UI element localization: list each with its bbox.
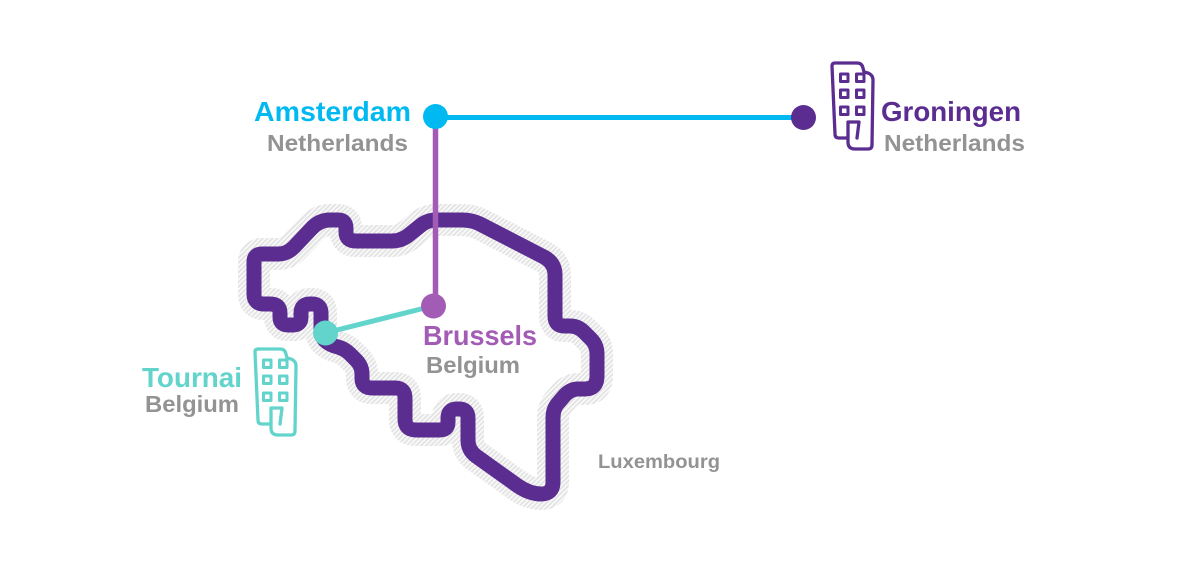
label: Amsterdam, Netherlands: Amsterdam [254, 96, 411, 127]
label: Tournai, Belgium [142, 362, 242, 417]
label: Amsterdam, Netherlands: Netherlands [267, 130, 408, 156]
label: Groningen, Netherlands [881, 96, 1025, 156]
label: Luxembourg: Luxembourg [598, 452, 720, 473]
map outline purple stroke [254, 220, 597, 494]
label: Groningen, Netherlands: Netherlands [884, 130, 1025, 156]
label: Tournai, Belgium: Tournai [142, 362, 242, 393]
label: Brussels, Belgium [423, 320, 537, 378]
label: Brussels, Belgium: Brussels [423, 320, 537, 351]
label: Brussels, Belgium: Belgium [426, 352, 520, 378]
marker: Brussels [421, 294, 446, 318]
marker: Groningen [791, 105, 816, 130]
route: Amsterdam to Groningen [435, 115, 803, 120]
marker: Amsterdam [423, 104, 448, 129]
label: Groningen, Netherlands: Groningen [881, 96, 1021, 127]
icon: Tournai building [255, 349, 296, 435]
route: Brussels to Tournai [325, 306, 433, 333]
map: Belgium outline [254, 220, 597, 494]
route: Amsterdam to Brussels [433, 117, 438, 306]
marker: Tournai [313, 320, 338, 346]
map outline hatched halo [254, 220, 597, 494]
label: Tournai, Belgium: Belgium [145, 391, 239, 417]
icon: Groningen building [832, 63, 873, 149]
label: Amsterdam, Netherlands [254, 96, 411, 156]
